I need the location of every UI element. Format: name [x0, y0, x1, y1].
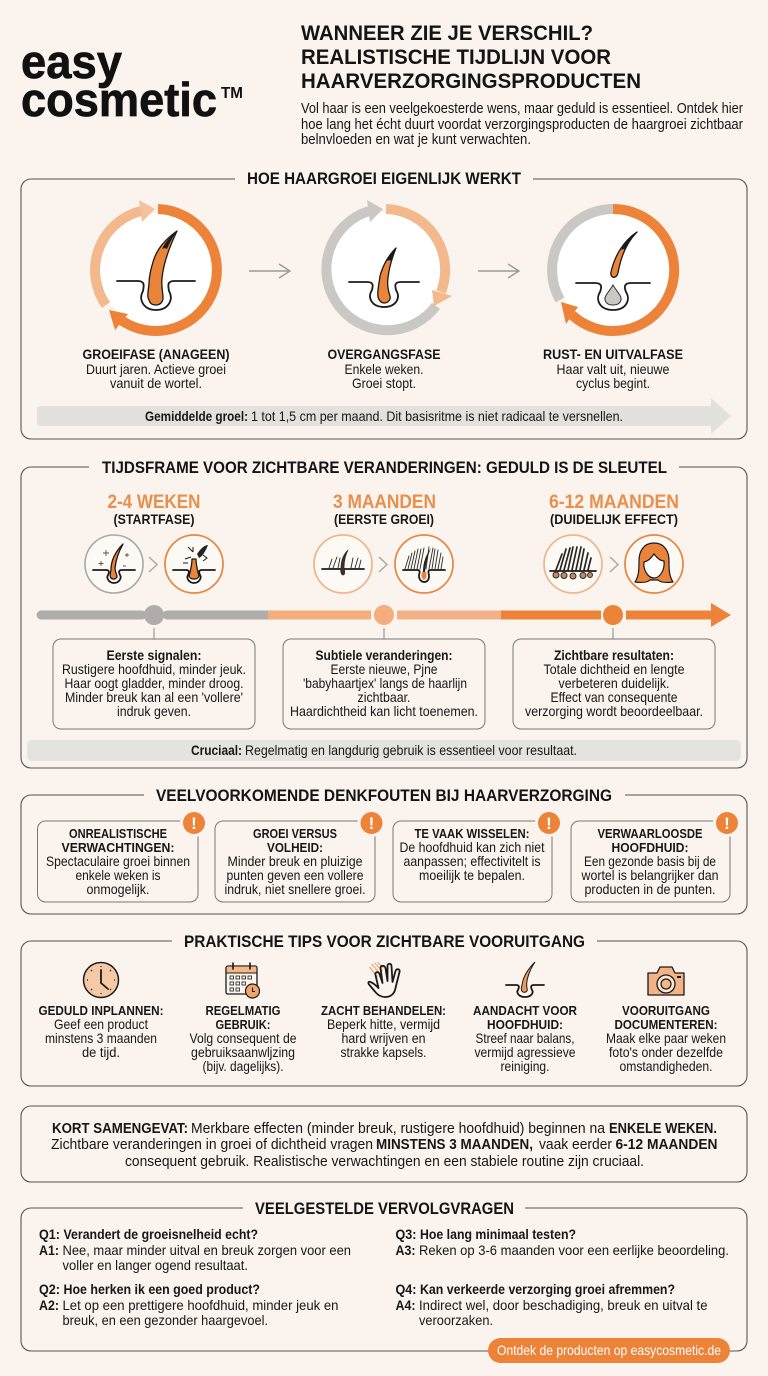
- faq: q3: [396, 1226, 729, 1258]
- panel: praktische tips: [21, 932, 747, 1086]
- panel: kort samengevat: consequent gebruik. Realistische verwachtingen en een stabiele routine zijn cruciaal.: [125, 1154, 644, 1170]
- phase title: 2-4 weken: (STARTFASE): [114, 511, 194, 527]
- tip: vooruitgang documenteren: VOORUITGANG: [622, 1003, 710, 1018]
- button: ontdek de producten: [488, 1338, 730, 1363]
- tip: aandacht voor hoofdhuid: Streef naar balans,: [476, 1030, 574, 1046]
- panel: kort samengevat: [21, 1106, 747, 1182]
- faq: q3: Q3:: [396, 1226, 416, 1242]
- icon: camera: [648, 967, 684, 995]
- icon: groeifase cycle: [95, 200, 217, 331]
- faq: q3: Reken op 3-6 maanden voor een eerlijke beoordeling.: [419, 1242, 729, 1258]
- card: te vaak wisselen: moeilijk te bepalen.: [419, 867, 525, 883]
- panel: kort samengevat: vaak eerder: [539, 1137, 612, 1153]
- card: eerste signalen: Rustigere hoofdhuid, minder jeuk.: [62, 661, 246, 677]
- card: onrealistische verwachtingen: ONREALISTISCHE: [69, 826, 167, 841]
- card: eerste signalen: [53, 639, 255, 729]
- card: eerste signalen: indruk geven.: [117, 703, 191, 719]
- tip: geduld inplannen: de tijd.: [82, 1044, 120, 1060]
- icon: chevron: [610, 557, 618, 572]
- faq: q2: Let op een prettigere hoofdhuid, minder jeuk en: [62, 1297, 338, 1313]
- tip: regelmatig gebruik: gebruiksaanwljzing: [191, 1044, 295, 1060]
- tip: regelmatig gebruik: REGELMATIG: [206, 1003, 280, 1018]
- card: onrealistische verwachtingen: VERWACHTINGEN:: [62, 840, 174, 855]
- tip: aandacht voor hoofdhuid: reiniging.: [500, 1058, 550, 1074]
- text: overgangsfase: Enkele weken.: [344, 361, 424, 377]
- phase title: 3 maanden: 3 MAANDEN: [333, 492, 436, 513]
- timeline: [41, 603, 731, 639]
- card: onrealistische verwachtingen: Spectaculaire groei binnen: [46, 853, 190, 869]
- faq: q2: [39, 1281, 338, 1328]
- card: onrealistische verwachtingen: [38, 809, 208, 902]
- tip: geduld inplannen: Geef een product: [54, 1016, 148, 1032]
- panel: kort samengevat: Merkbare effecten (minder breuk, rustigere hoofdhuid) beginnen na: [191, 1121, 606, 1137]
- card: subtiele veranderingen: Haardichtheid kan licht toenemen.: [290, 703, 478, 719]
- card: subtiele veranderingen: Subtiele veranderingen:: [316, 647, 452, 663]
- tip: vooruitgang documenteren: Maak elke paar weken: [606, 1030, 726, 1046]
- tip: vooruitgang documenteren: [606, 1003, 726, 1074]
- faq: q1: Verandert de groeisnelheid echt?: [64, 1226, 258, 1242]
- tip: zacht behandelen: [321, 1003, 446, 1060]
- card: onrealistische verwachtingen: onmogelijk.: [86, 881, 150, 897]
- card: eerste signalen: Minder breuk kan al een 'vollere': [65, 689, 243, 705]
- tip: zacht behandelen: Beperk hitte, vermijd: [327, 1016, 440, 1032]
- logo: easy cosmetic: cosmetic: [21, 73, 217, 126]
- card: onrealistische verwachtingen: enkele weken is: [76, 867, 160, 883]
- faq: q1: [39, 1226, 351, 1273]
- tip: aandacht voor hoofdhuid: HOOFDHUID:: [487, 1017, 563, 1032]
- title: [301, 22, 641, 93]
- faq: q4: Indirect wel, door beschadiging, breuk en uitval te: [419, 1297, 708, 1313]
- tip: aandacht voor hoofdhuid: [473, 1003, 578, 1074]
- card: groei versus volheid: Minder breuk en pluizige: [228, 853, 363, 869]
- tip: vooruitgang documenteren: foto's onder dezelfde: [609, 1044, 723, 1060]
- text: groeifase: vanuit de wortel.: [110, 375, 202, 391]
- card: verwaarloosde hoofdhuid: producten in de punten.: [584, 881, 716, 897]
- text: overgangsfase: OVERGANGSFASE: [328, 347, 440, 362]
- panel: denkfouten: [21, 786, 747, 914]
- faq: q2: A2:: [39, 1297, 59, 1313]
- button: ontdek de producten: Ontdek de producten op easycosmetic.de: [497, 1342, 721, 1358]
- panel: tijdsframe: [21, 458, 747, 768]
- logo: easy cosmetic: easy: [21, 35, 122, 88]
- tip: geduld inplannen: GEDULD INPLANNEN:: [38, 1003, 164, 1018]
- intro text: belnvloeden en wat je kunt verwachten.: [301, 132, 531, 148]
- heading: vervolgvragen: VEELGESTELDE VERVOLGVRAGEN: [255, 1199, 514, 1218]
- panel: kort samengevat: KORT SAMENGEVAT:: [52, 1121, 188, 1137]
- tip: vooruitgang documenteren: omstandigheden.: [620, 1058, 712, 1074]
- faq: q4: Kan verkeerde verzorging groei afremmen?: [420, 1281, 675, 1297]
- tip: zacht behandelen: strakke kapsels.: [340, 1044, 426, 1060]
- text: rustfase: cyclus begint.: [576, 375, 650, 391]
- heading: praktische tips: PRAKTISCHE TIPS VOOR ZICHTBARE VOORUITGANG: [184, 932, 585, 951]
- card: groei versus volheid: GROEI VERSUS: [253, 826, 337, 841]
- icon: klok: [84, 962, 118, 998]
- callout: cruciaal: Regelmatig en langdurig gebruik is essentieel voor resultaat.: [245, 742, 577, 758]
- card: verwaarloosde hoofdhuid: !: [724, 814, 730, 833]
- icon: babyhaartjes: [314, 535, 372, 593]
- card: eerste signalen: Eerste signalen:: [106, 647, 202, 663]
- icon: haarwortel: [506, 962, 544, 997]
- card: subtiele veranderingen: 'babyhaartjex' langs de haarlijn: [303, 675, 467, 691]
- panel: kort samengevat: Zichtbare veranderingen in groei of dichtheid vragen: [51, 1137, 373, 1153]
- tip: geduld inplannen: [38, 1003, 164, 1060]
- intro text: [301, 101, 743, 148]
- card: groei versus volheid: !: [369, 814, 374, 833]
- card: subtiele veranderingen: [283, 639, 485, 729]
- card: groei versus volheid: indruk, niet snellere groei.: [224, 881, 366, 897]
- card: eerste signalen: Haar oogt gladder, minder droog.: [64, 675, 244, 691]
- card: zichtbare resultaten: verzorging wordt beoordeelbaar.: [525, 703, 703, 719]
- icon: dichter haar: [544, 535, 602, 593]
- title: HAARVERZORGINGSPRODUCTEN: [301, 70, 641, 93]
- phase title: 6-12 maanden: [549, 492, 679, 527]
- faq: q2: breuk, en een gezonder haargevoel.: [62, 1312, 268, 1328]
- tip: regelmatig gebruik: Volg consequent de: [190, 1030, 297, 1046]
- card: zichtbare resultaten: verbeteren duidelijk.: [558, 675, 670, 691]
- phase title: 3 maanden: [333, 492, 436, 527]
- icon: rustige hoofdhuid: [85, 535, 143, 593]
- faq: q2: Hoe herken ik een goed product?: [64, 1281, 260, 1297]
- text: groeifase: Duurt jaren. Actieve groei: [86, 361, 226, 377]
- icon: nieuwe groei: [395, 535, 453, 593]
- panel: hoe haargroei werkt: [21, 169, 747, 439]
- title: WANNEER ZIE JE VERSCHIL?: [301, 22, 593, 45]
- faq: q1: voller en langer ogend resultaat.: [62, 1257, 248, 1273]
- card: groei versus volheid: [215, 809, 386, 902]
- callout: gemiddelde groei: 1 tot 1,5 cm per maand. Dit basisritme is niet radicaal te versnellen.: [251, 408, 623, 424]
- faq: q4: A4:: [396, 1297, 416, 1313]
- callout: cruciaal: [27, 740, 741, 761]
- tip: vooruitgang documenteren: DOCUMENTEREN:: [614, 1017, 718, 1032]
- icon: vrouw met vol haar: [625, 535, 683, 593]
- arrow: fase 1 naar 2: [249, 264, 290, 278]
- tip: regelmatig gebruik: (bijv. dagelijks).: [202, 1058, 284, 1074]
- tip: regelmatig gebruik: [190, 1003, 297, 1074]
- panel: kort samengevat: 6-12 MAANDEN: [616, 1137, 718, 1153]
- heading: hoe haargroei werkt: HOE HAARGROEI EIGENLIJK WERKT: [247, 169, 522, 188]
- logo: easy cosmetic: [21, 35, 243, 126]
- card: subtiele veranderingen: Eerste nieuwe, Pjne: [330, 661, 438, 677]
- card: zichtbare resultaten: Totale dichtheid en lengte: [544, 661, 685, 677]
- card: onrealistische verwachtingen: !: [191, 814, 197, 833]
- faq: q4: Q4:: [396, 1281, 416, 1297]
- heading: tijdsframe: TIJDSFRAME VOOR ZICHTBARE VERANDERINGEN: GEDULD IS DE SLEUTEL: [102, 458, 667, 477]
- card: verwaarloosde hoofdhuid: VERWAARLOOSDE: [598, 826, 703, 841]
- panel: kort samengevat: ENKELE WEKEN.: [609, 1121, 717, 1137]
- tip: zacht behandelen: hard wrijven en: [342, 1030, 426, 1046]
- text: overgangsfase: Groei stopt.: [352, 375, 416, 391]
- card: te vaak wisselen: De hoofdhuid kan zich niet: [400, 839, 545, 855]
- callout: gemiddelde groei: Gemiddelde groel:: [145, 408, 248, 424]
- icon: rustfase cycle: [552, 209, 674, 331]
- text: overgangsfase: [328, 347, 440, 391]
- faq: q1: A1:: [39, 1242, 59, 1258]
- panel: veelgestelde vervolgvragen: [21, 1199, 747, 1363]
- icon: zwaaiende hand: [368, 962, 400, 997]
- card: groei versus volheid: punten geven een vollere: [226, 867, 364, 883]
- callout: cruciaal: Cruciaal:: [191, 742, 242, 758]
- text: groeifase: [82, 347, 230, 391]
- phase title: 2-4 weken: [108, 492, 200, 527]
- icon: kalender: [226, 963, 260, 998]
- faq: q2: Q2:: [39, 1281, 60, 1297]
- phase title: 6-12 maanden: (DUIDELIJK EFFECT): [550, 511, 678, 527]
- callout: gemiddelde groei: [37, 398, 731, 434]
- card: groei versus volheid: VOLHEID:: [267, 840, 323, 855]
- card: zichtbare resultaten: Effect van consequente: [550, 689, 678, 705]
- title: REALISTISCHE TIJDLIJN VOOR: [301, 46, 611, 69]
- icon: overgangsfase cycle: [326, 200, 452, 330]
- card: verwaarloosde hoofdhuid: Een gezonde basis bij de: [584, 853, 716, 869]
- icon: minder breuk: [165, 535, 223, 593]
- tip: regelmatig gebruik: GEBRUIK:: [216, 1017, 270, 1032]
- phase title: 2-4 weken: 2-4 WEKEN: [108, 492, 200, 513]
- faq: q1: Nee, maar minder uitval en breuk zorgen voor een: [62, 1242, 351, 1258]
- heading: denkfouten: VEELVOORKOMENDE DENKFOUTEN BIJ HAARVERZORGING: [156, 786, 612, 805]
- tip: aandacht voor hoofdhuid: AANDACHT VOOR: [473, 1003, 578, 1018]
- card: zichtbare resultaten: Zichtbare resultaten:: [554, 647, 674, 663]
- tip: geduld inplannen: minstens 3 maanden: [45, 1030, 157, 1046]
- text: rustfase: Haar valt uit, nieuwe: [556, 361, 670, 377]
- icon: chevron: [379, 557, 387, 572]
- text: groeifase: GROEIFASE (ANAGEEN): [82, 347, 230, 362]
- card: te vaak wisselen: !: [546, 814, 552, 833]
- card: te vaak wisselen: [393, 809, 563, 902]
- panel: kort samengevat: MINSTENS 3 MAANDEN,: [376, 1137, 533, 1153]
- faq: q3: A3:: [396, 1242, 416, 1258]
- text: rustfase: [543, 347, 683, 391]
- phase title: 3 maanden: (EERSTE GROEI): [334, 511, 434, 527]
- icon: chevron: [149, 557, 157, 572]
- faq: q4: [396, 1281, 708, 1328]
- faq: q3: Hoe lang minimaal testen?: [420, 1226, 576, 1242]
- faq: q1: Q1:: [39, 1226, 60, 1242]
- phase title: 6-12 maanden: 6-12 MAANDEN: [549, 492, 679, 513]
- tip: zacht behandelen: ZACHT BEHANDELEN:: [321, 1003, 446, 1018]
- logo: easy cosmetic: TM: [221, 85, 243, 102]
- faq: q4: veroorzaken.: [419, 1312, 493, 1328]
- card: verwaarloosde hoofdhuid: HOOFDHUID:: [612, 840, 688, 855]
- card: subtiele veranderingen: zichtbaar.: [358, 689, 410, 705]
- card: verwaarloosde hoofdhuid: wortel is belangrijker dan: [581, 867, 718, 883]
- text: rustfase: RUST- EN UITVALFASE: [543, 347, 683, 362]
- arrow: fase 2 naar 3: [478, 264, 519, 278]
- card: te vaak wisselen: TE VAAK WISSELEN:: [414, 826, 530, 841]
- tip: aandacht voor hoofdhuid: vermijd agressieve: [474, 1044, 576, 1060]
- card: verwaarloosde hoofdhuid: [571, 809, 741, 902]
- card: te vaak wisselen: aanpassen; effectivitelt is: [404, 853, 540, 869]
- card: zichtbare resultaten: [513, 639, 715, 729]
